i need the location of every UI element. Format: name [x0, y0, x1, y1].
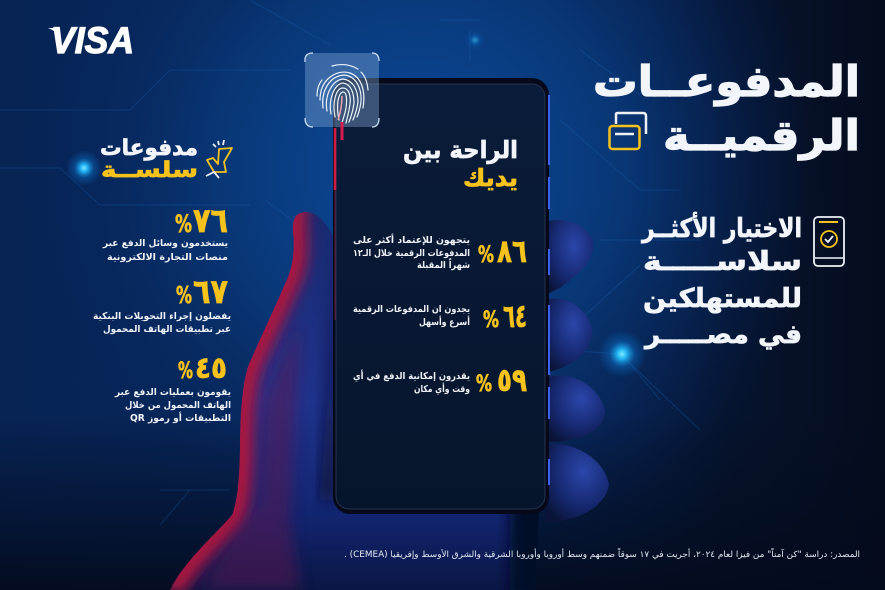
left panel heading — [100, 136, 198, 183]
phone stat: 64% — [353, 297, 527, 335]
source footnote: المصدر: دراسة "كن آمناً" من فيزا لعام ٢٠٢٤، أجريت في ١٧ سوقاً ضمنهم وسط أوروبا وأوروبا الشرقية والشرق الأوسط وإفريقيا (CEMEA) . — [344, 547, 860, 560]
left stat: 67% — [93, 272, 231, 335]
left stat: 76%: يستخدمون وسائل الدفع عبر — [102, 238, 228, 249]
left stat: 67%: عبر تطبيقات الهاتف المحمول — [103, 324, 231, 335]
hand: right fingers — [545, 220, 609, 522]
subtitle: للمستهلكين — [643, 284, 802, 314]
phone stat: 59%: ٥٩ — [497, 361, 527, 399]
left panel heading: سلســة — [101, 158, 198, 183]
phone heading: يديك — [463, 164, 518, 192]
left stat: 45% — [114, 351, 231, 424]
phone — [333, 78, 549, 514]
left stat: 67%: يفضلون إجراء التحويلات البنكية — [93, 311, 231, 322]
logo: VISA: VISA — [51, 20, 134, 61]
glowing dot left — [66, 150, 102, 186]
main title: الرقميــة — [663, 111, 860, 161]
left stat: 67%: % — [176, 283, 192, 309]
phone stat: 64%: يجدون ان المدفوعات الرقمية — [353, 304, 470, 315]
phone stat: 59%: يقدرون إمكانية الدفع في أي — [353, 369, 470, 382]
left stat: 76%: ٧٦ — [193, 201, 228, 241]
phone stat: 86%: % — [478, 243, 494, 268]
phone heading: الراحة بين — [403, 136, 518, 164]
main title — [593, 57, 860, 161]
subtitle: في مصـــــر — [643, 320, 802, 350]
phone stat: 86%: ٨٦ — [497, 232, 527, 270]
left stat: 45%: التطبيقات أو رموز QR — [130, 411, 231, 424]
phone stat: 59%: وقت وأي مكان — [414, 382, 470, 395]
fingerprint sensor tile — [305, 53, 379, 140]
phone stat: 86% — [353, 232, 527, 271]
phone stat: 64%: % — [483, 308, 499, 333]
main title: المدفوعــات — [593, 57, 860, 107]
left stat: 76%: % — [175, 210, 192, 238]
icon: payment cards — [610, 113, 646, 149]
left panel heading: مدفوعات — [100, 136, 198, 161]
phone stat: 64%: أسرع وأسهل — [419, 315, 470, 328]
subtitle — [640, 212, 802, 350]
left stat: 76%: منصات التجارة الالكترونية — [107, 252, 228, 263]
left stat: 45%: يقومون بعمليات الدفع عبر — [114, 387, 231, 398]
subtitle: سلاســـــة — [643, 247, 802, 277]
phone stat: 86%: المدفوعات الرقمية خلال الـ١٢ — [353, 248, 470, 259]
phone stat: 59%: % — [476, 372, 492, 397]
phone stat: 59% — [353, 361, 527, 399]
left stat: 45%: ٤٥ — [195, 351, 227, 386]
left stat: 67%: ٦٧ — [193, 272, 228, 312]
glowing dot right — [598, 330, 646, 378]
glowing dot top — [465, 30, 485, 50]
phone stat: 86%: شهراً المقبلة — [417, 258, 470, 271]
icon: tapping hand — [206, 140, 232, 178]
phone heading — [403, 136, 518, 192]
hand: palm and thumb — [160, 205, 550, 590]
left stat: 76% — [102, 201, 228, 263]
phone stat: 64%: ٦٤ — [503, 297, 527, 335]
left stat: 45%: % — [178, 359, 193, 384]
icon: phone with check — [814, 217, 844, 266]
phone stat: 86%: يتجهون للإعتماد أكثر على — [353, 233, 470, 246]
left stat: 45%: الهاتف المحمول من خلال — [125, 400, 231, 411]
subtitle: الاختيار الأكثــر — [640, 212, 802, 244]
icon: fingerprint — [317, 65, 368, 123]
